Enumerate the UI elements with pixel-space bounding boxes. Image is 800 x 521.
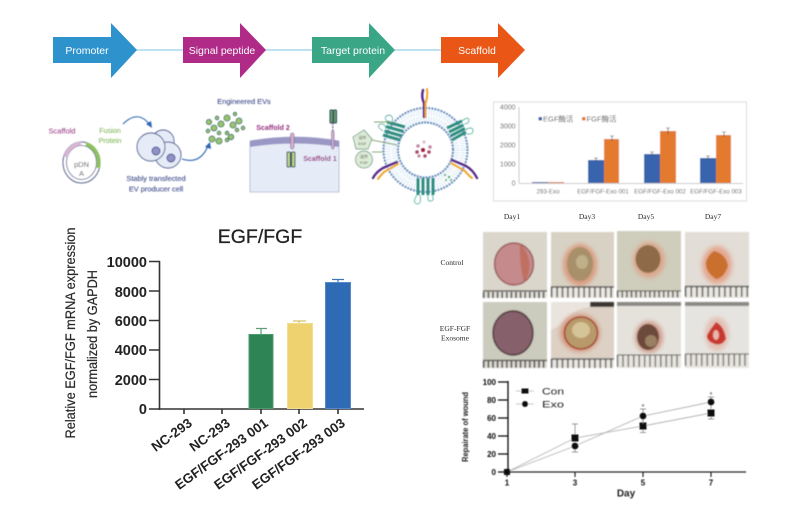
icon: FGF ligand circle: 适件: [360, 153, 368, 159]
x axis and category labels: EGF/FGF-Exo 002: [634, 188, 686, 196]
transmembrane protein: upper left: [379, 115, 405, 140]
icon: EGF ligand pentagon: [353, 130, 372, 149]
label: Fusion Protein: Fusion: [99, 126, 121, 135]
icon: cell membrane with scaffolds: [250, 110, 339, 192]
icon: pDNA plasmid: pDN: [74, 160, 89, 169]
series: Con: [504, 410, 714, 475]
arrow: Signal peptide: [183, 23, 266, 78]
bar: EGF/FGF-293 003: [326, 280, 350, 408]
x axis and category labels: EGF/FGF-Exo 001: [577, 188, 629, 196]
diagram: engineered EV production workflow: [49, 97, 339, 194]
y axis with ticks: 100: [483, 378, 497, 387]
category labels: [149, 415, 348, 493]
chart title: EGF/FGF: [218, 226, 302, 248]
photo: exosome day 3: [551, 302, 614, 368]
photo: exosome day 1: [483, 302, 547, 368]
label: Scaffold 2: Scaffold 2: [256, 125, 290, 132]
row label: Control: Control: [441, 258, 463, 267]
category labels: EGF/FGF-293 003: [249, 415, 348, 493]
y axis with ticks: 4000: [115, 343, 147, 359]
arrow: Scaffold: [441, 23, 525, 78]
y axis with ticks: 80: [487, 396, 497, 405]
x axis with ticks: 3: [573, 478, 578, 488]
transmembrane protein: upper right: [447, 118, 473, 140]
panel: EGF/FGF mRNA expression bar chart: [62, 226, 364, 493]
panel: wound healing photographs: [440, 212, 749, 368]
y axis and tick labels: 2000: [500, 142, 516, 150]
x axis with ticks: [505, 472, 746, 488]
photo: exosome day 7: [685, 302, 749, 368]
arrow: plasmid to cell: [123, 117, 152, 128]
photo: control day 1: [483, 232, 547, 298]
x axis and category labels: EGF/FGF-Exo 003: [690, 188, 742, 196]
series: Exo: *: [710, 392, 713, 399]
y axis and tick labels: [500, 104, 519, 188]
legend: [538, 114, 617, 124]
y axis with ticks: 2000: [115, 373, 147, 389]
icon: FGF ligand circle: [356, 151, 372, 168]
x axis and category labels: [519, 184, 743, 196]
y axis and tick labels: 1000: [500, 162, 516, 168]
photo: control day 3: [551, 232, 614, 298]
y axis title line 2: normalized by GAPDH: [84, 270, 100, 398]
legend: FGF酶活: [586, 114, 617, 124]
icon: EGF ligand pentagon: EGF: [358, 141, 367, 146]
label: Fusion Protein: Protein: [99, 136, 121, 145]
icon: FGF ligand circle: FGF: [360, 160, 369, 165]
error bars: [594, 128, 726, 161]
arrow: Signal peptide: Signal peptide: [189, 45, 255, 57]
label: Engineered EVs: Engineered EVs: [217, 97, 271, 106]
y axis and tick labels: 3000: [500, 124, 516, 130]
category labels: NC-293: [149, 415, 195, 455]
y axis with ticks: 20: [487, 450, 497, 459]
bars: [532, 154, 716, 183]
y axis with ticks: 10000: [107, 255, 147, 271]
x axis with ticks: 5: [641, 478, 646, 488]
y axis with ticks: 8000: [115, 285, 147, 301]
bar: EGF/FGF-293 002: [288, 321, 312, 408]
label: Stably transfected EV producer cell: EV producer cell: [129, 184, 183, 194]
x axis with ticks: 7: [709, 478, 714, 488]
arrow: Target protein: [312, 23, 395, 78]
panel: wound repair rate line chart: [461, 378, 746, 500]
category labels: NC-293: [187, 415, 233, 455]
column labels: [504, 212, 721, 221]
icon: engineered EV cluster: [206, 112, 245, 144]
row label: EGF-FGF Exosome: Exosome: [441, 334, 470, 342]
legend: [516, 386, 564, 410]
label: Stably transfected EV producer cell: Stably transfected: [126, 174, 186, 183]
process flow: promoter to scaffold: [53, 23, 525, 78]
row label: EGF-FGF Exosome: EGF-FGF: [440, 324, 470, 333]
column labels: Day3: [579, 212, 595, 221]
diagram: engineered exosome vesicle: [353, 89, 477, 204]
icon: pDNA plasmid: A: [79, 169, 84, 178]
category labels: EGF/FGF-293 001: [172, 415, 271, 493]
x axis title: Day: [617, 488, 636, 500]
transmembrane protein: bottom: [414, 178, 433, 204]
photo: control day 5: [617, 231, 681, 298]
lipid bilayer: [384, 108, 468, 192]
photo: exosome day 5: [617, 302, 681, 368]
y axis with ticks: [107, 255, 160, 418]
y axis and tick labels: 4000: [500, 104, 516, 112]
category labels: EGF/FGF-293 002: [211, 415, 310, 493]
bar: EGF/FGF-293 001: [249, 328, 273, 408]
column labels: Day7: [705, 212, 721, 221]
x axis and category labels: 293-Exo: [536, 188, 560, 196]
panel: EGF and FGF activity bar chart: [494, 102, 746, 201]
column labels: Day5: [638, 212, 654, 221]
spike: scaffold lower left: [373, 162, 398, 179]
arrow: cell to EVs: [182, 142, 211, 160]
label: Scaffold 1: Scaffold 1: [303, 156, 337, 163]
icon: EGF ligand pentagon: 适件: [358, 134, 366, 140]
series: Exo: [504, 392, 714, 475]
cargo: green molecules: [444, 174, 452, 181]
y axis with ticks: 0: [139, 402, 147, 418]
y axis with ticks: 0: [492, 468, 497, 477]
column labels: Day1: [504, 212, 520, 221]
arrow: Scaffold: Scaffold: [458, 45, 496, 57]
arrow: Target protein: Target protein: [321, 45, 385, 57]
label: Scaffold: Scaffold: [49, 126, 75, 136]
spike: scaffold top: [422, 89, 427, 117]
icon: EV producer cells: [137, 130, 181, 168]
x axis with ticks: [159, 409, 364, 414]
ligand connector lines: [372, 122, 397, 152]
x axis with ticks: 1: [505, 478, 510, 488]
y axis title: Repairate of wound: [461, 392, 470, 462]
series: Exo: *: [642, 404, 645, 411]
y axis with ticks: 60: [487, 414, 497, 423]
photo: control day 7: [685, 232, 749, 298]
icon: pDNA plasmid: [63, 142, 100, 183]
y axis with ticks: 40: [487, 432, 497, 441]
legend: EGF酶活: [543, 114, 574, 124]
spike: scaffold lower right: [451, 160, 477, 178]
legend: Con: [542, 386, 564, 398]
y axis title: Relative EGF/FGF mRNA expression: [62, 228, 78, 438]
y axis and tick labels: 0: [512, 180, 516, 188]
arrow: Promoter: [53, 23, 137, 78]
arrow: Promoter: Promoter: [65, 45, 109, 57]
y axis with ticks: 6000: [115, 314, 147, 330]
cargo: central molecules: [415, 140, 432, 158]
legend: Exo: [542, 400, 564, 410]
y axis with ticks: [483, 378, 508, 477]
